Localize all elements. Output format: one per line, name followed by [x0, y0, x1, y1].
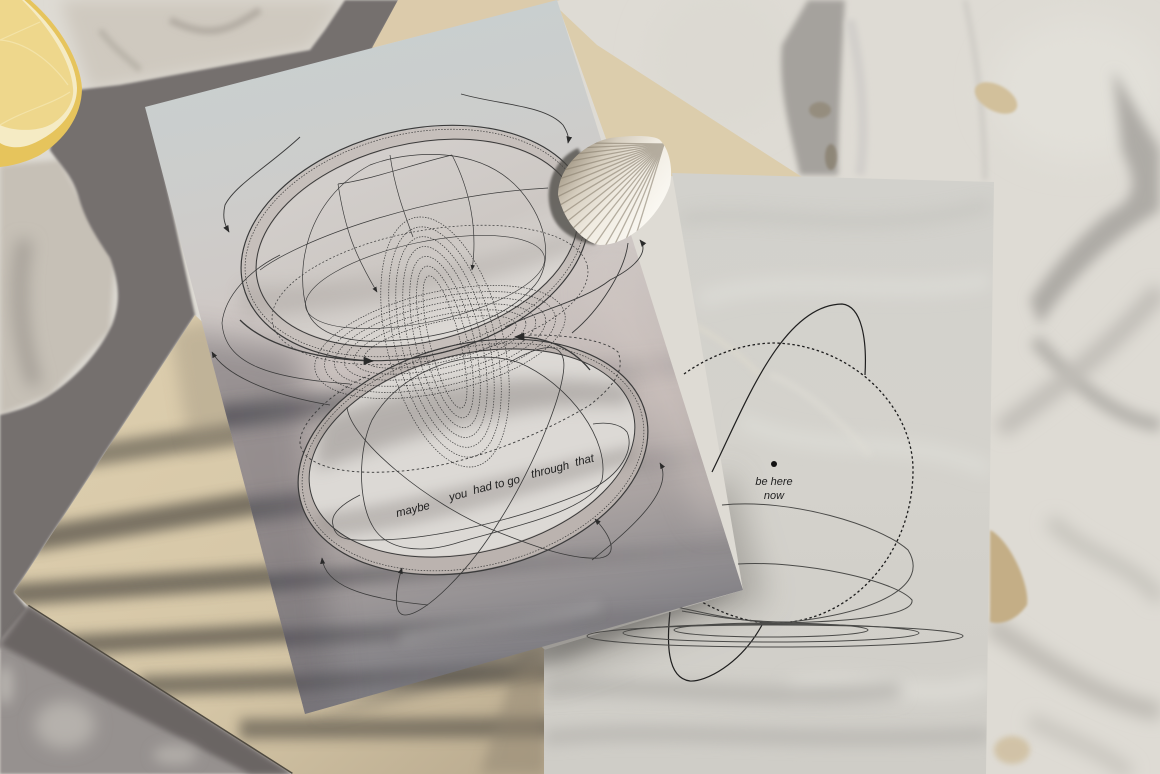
- left card: [145, 0, 760, 720]
- lower ring band: [298, 340, 646, 574]
- upper ring strokes: [216, 91, 614, 395]
- nested vertical dotted loops: [358, 204, 532, 480]
- left card line art: [212, 91, 673, 615]
- fold shadow right: [1030, 70, 1160, 325]
- lemon slice: [0, 0, 82, 167]
- caption second line: now: [764, 490, 785, 502]
- lower ring plate: [310, 350, 634, 556]
- shadow across text band: [310, 445, 635, 538]
- sand patches: [809, 76, 1030, 764]
- caption: be here now: be here: [755, 476, 793, 488]
- word: had to go: had to go: [472, 474, 522, 497]
- beige envelope behind cards: [372, 0, 802, 177]
- planet diagram: [587, 304, 963, 681]
- cloth shadow lower left: [0, 606, 292, 774]
- shadow across upper ring: [240, 225, 590, 315]
- word: through: through: [530, 460, 571, 481]
- globe grid: [222, 154, 599, 387]
- seashell: [547, 136, 672, 246]
- nested horizontal dotted loops: [304, 264, 576, 420]
- dashed lower equator: [300, 335, 620, 472]
- text: maybe you had to go through that: [395, 452, 596, 520]
- shell body: [558, 136, 672, 245]
- right card: [544, 173, 994, 774]
- light and shadow on left card: [170, 280, 760, 720]
- word: maybe: maybe: [395, 500, 431, 520]
- left card shadow: [310, 590, 743, 720]
- centre dot: [771, 461, 777, 467]
- flow arrows: [224, 94, 643, 370]
- lower orbit curves: [212, 348, 663, 615]
- fold shadow top centre: [781, 0, 845, 175]
- cast shadow on cloth: [0, 0, 400, 650]
- upper ring band: [242, 126, 583, 318]
- shell shadow: [549, 148, 595, 245]
- word: you: you: [447, 488, 469, 504]
- beige book lower left: [0, 300, 560, 774]
- lower ring strokes: [273, 304, 673, 610]
- upper ring plate: [257, 140, 574, 346]
- word: that: that: [574, 452, 596, 469]
- water reflections on right card: [544, 205, 990, 738]
- shadow across plates: [315, 379, 630, 470]
